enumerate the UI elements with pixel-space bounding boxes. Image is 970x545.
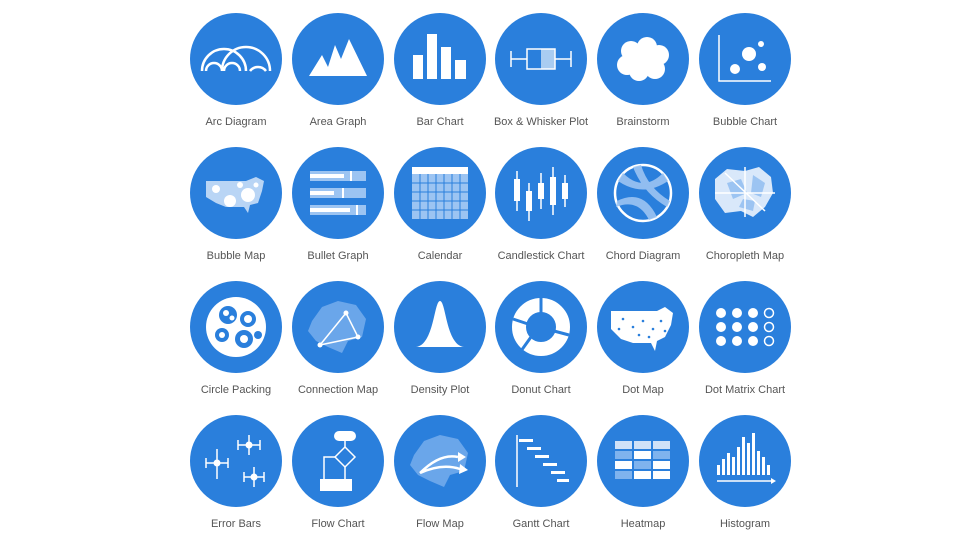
icon: Heatmap	[597, 415, 689, 530]
icon: Error Bars	[190, 415, 282, 530]
icon: Box & Whisker Plot: Box & Whisker Plot	[494, 116, 588, 128]
icon: Bullet Graph	[292, 147, 384, 262]
icon: Calendar	[394, 147, 486, 262]
icon: Connection Map	[292, 281, 384, 396]
icon: Donut Chart	[495, 281, 587, 396]
icon: Bar Chart	[394, 13, 486, 128]
icon: Bubble Map	[190, 147, 282, 262]
icon: Chord Diagram: Chord Diagram	[606, 250, 680, 262]
icon: Arc Diagram	[190, 13, 282, 128]
icon: Density Plot	[394, 281, 486, 396]
icon: Chord Diagram	[597, 147, 689, 262]
icon: Circle Packing: Circle Packing	[201, 384, 271, 396]
icon: Histogram: Histogram	[720, 518, 770, 530]
icon: Gantt Chart: Gantt Chart	[513, 518, 569, 530]
icon: Dot Matrix Chart	[699, 281, 791, 396]
icon: Arc Diagram: Arc Diagram	[205, 116, 267, 128]
icon: Calendar: Calendar	[418, 250, 463, 262]
icon: Bar Chart: Bar Chart	[416, 116, 464, 128]
icon: Bubble Chart: Bubble Chart	[713, 116, 777, 128]
icon: Brainstorm: Brainstorm	[616, 116, 670, 128]
icon: Dot Map	[597, 281, 689, 396]
icon: Gantt Chart	[495, 415, 587, 530]
icon: Area Graph: Area Graph	[310, 116, 366, 128]
icon: Connection Map: Connection Map	[298, 384, 378, 396]
icon: Circle Packing	[190, 281, 282, 396]
icon: Dot Matrix Chart: Dot Matrix Chart	[705, 384, 785, 396]
icon: Heatmap: Heatmap	[621, 518, 665, 530]
icon: Flow Map: Flow Map	[416, 518, 464, 530]
icon: Flow Map	[394, 415, 486, 530]
icon: Choropleth Map	[699, 147, 791, 262]
icon: Flow Chart: Flow Chart	[311, 518, 365, 530]
icon: Dot Map: Dot Map	[622, 384, 664, 396]
icon: Bullet Graph: Bullet Graph	[307, 250, 369, 262]
icon: Brainstorm	[597, 13, 689, 128]
icon: Choropleth Map: Choropleth Map	[706, 250, 784, 262]
icon: Error Bars: Error Bars	[211, 518, 262, 530]
icon: Histogram	[699, 415, 791, 530]
icon: Candlestick Chart	[495, 147, 587, 262]
icon: Area Graph	[292, 13, 384, 128]
icon: Density Plot: Density Plot	[411, 384, 469, 396]
icon: Candlestick Chart: Candlestick Chart	[498, 250, 584, 262]
icon: Flow Chart	[292, 415, 384, 530]
icon: Bubble Chart	[699, 13, 791, 128]
icon: Bubble Map: Bubble Map	[207, 250, 265, 262]
icon: Donut Chart: Donut Chart	[511, 384, 571, 396]
icon: Box & Whisker Plot	[494, 13, 588, 128]
